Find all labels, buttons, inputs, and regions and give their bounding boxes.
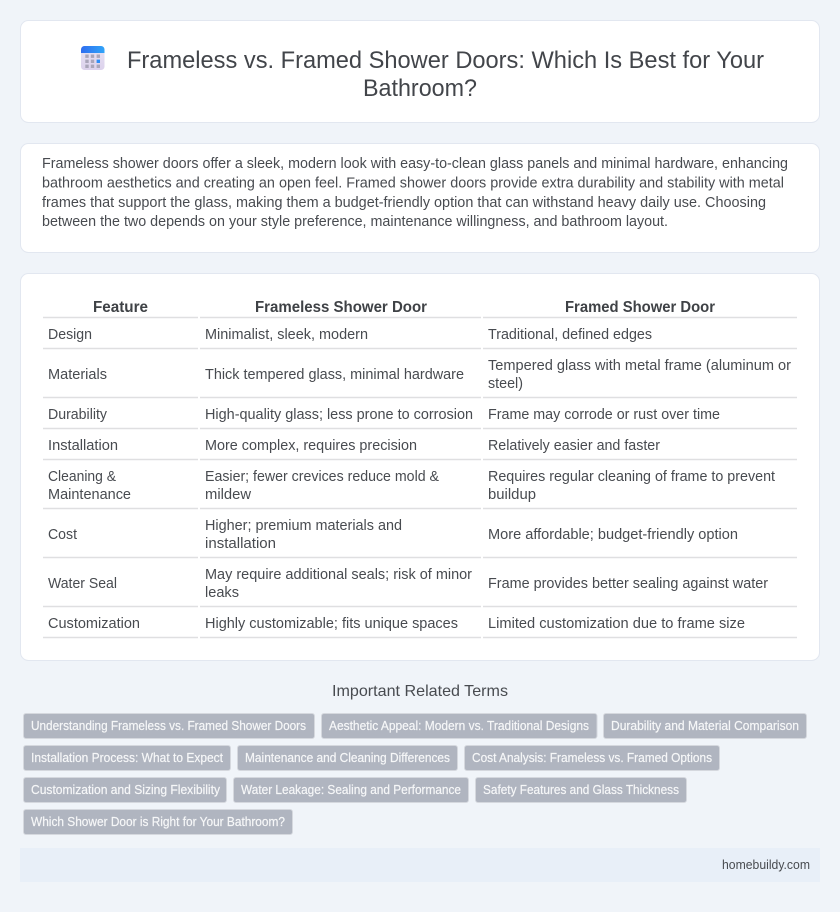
panel: intro text: Frameless shower doors offer a sleek, modern look with easy-to-clean glass panels and minimal hardware, enhancing xyxy=(42,156,788,172)
panel: intro text: between the two depends on your style preference, maintenance willingness, and bathroom layout. xyxy=(42,214,668,230)
footer xyxy=(20,848,820,882)
chip: understanding xyxy=(24,714,314,738)
row: design: Design xyxy=(48,327,92,343)
table header row: Framed Shower Door xyxy=(565,299,715,316)
row: water seal: Frame provides better sealing against water xyxy=(488,576,768,592)
row: water seal: May require additional seals; risk of minor xyxy=(205,567,472,583)
row: cleaning and maintenance: Easier; fewer crevices reduce mold & xyxy=(205,469,439,485)
chip: understanding: Understanding Frameless vs. Framed Shower Doors xyxy=(31,719,306,733)
chip: which shower door: Which Shower Door is Right for Your Bathroom? xyxy=(31,815,285,829)
row: customization: Limited customization due to frame size xyxy=(488,616,745,632)
row: cost: Higher; premium materials and xyxy=(205,518,402,534)
row: water seal xyxy=(43,567,797,606)
row: cleaning and maintenance: buildup xyxy=(488,487,536,503)
chip: installation: Installation Process: What to Expect xyxy=(31,751,224,765)
row: materials xyxy=(43,358,797,398)
row: installation: More complex, requires precision xyxy=(205,438,417,454)
row: cost: More affordable; budget-friendly option xyxy=(488,527,738,543)
row: materials: steel) xyxy=(488,376,523,392)
footer: homebuildy.com xyxy=(722,858,810,872)
chip: cost analysis: Cost Analysis: Frameless vs. Framed Options xyxy=(472,751,712,765)
title xyxy=(127,47,764,102)
chip: cost analysis xyxy=(464,746,720,770)
row: materials: Tempered glass with metal frame (aluminum or xyxy=(488,358,791,374)
chip: aesthetic appeal: Aesthetic Appeal: Modern vs. Traditional Designs xyxy=(329,719,589,733)
panel: header xyxy=(20,20,820,122)
panel: intro text: frames that support the glass, making them a budget-friendly option that can withstand heavy daily use. Choosing xyxy=(42,195,766,211)
chip: customization: Customization and Sizing Flexibility xyxy=(31,783,221,797)
chip: aesthetic appeal xyxy=(322,714,597,738)
row: cleaning and maintenance: Maintenance xyxy=(48,487,131,503)
row: cleaning and maintenance: Requires regular cleaning of frame to prevent xyxy=(488,469,775,485)
row: cleaning and maintenance: mildew xyxy=(205,487,252,503)
row: durability: High-quality glass; less prone to corrosion xyxy=(205,407,473,423)
row: water seal: Water Seal xyxy=(48,576,117,592)
title: Frameless vs. Framed Shower Doors: Which Is Best for Your xyxy=(127,47,764,74)
row: cleaning and maintenance: Cleaning & xyxy=(48,469,116,485)
chip: installation xyxy=(24,746,230,770)
row: durability xyxy=(43,407,797,428)
row: durability: Durability xyxy=(48,407,108,423)
row: customization xyxy=(43,616,797,638)
chip: durability: Durability and Material Comparison xyxy=(611,719,799,733)
row: installation: Relatively easier and faster xyxy=(488,438,660,454)
row: durability: Frame may corrode or rust over time xyxy=(488,407,720,423)
row: cost: installation xyxy=(205,536,276,552)
chip: water leakage xyxy=(234,778,468,802)
row: cleaning and maintenance xyxy=(43,469,797,508)
related term chips xyxy=(24,714,806,834)
chip: customization xyxy=(24,778,226,802)
chip: safety features: Safety Features and Glass Thickness xyxy=(483,783,679,797)
table header row xyxy=(43,299,797,318)
chip: durability xyxy=(604,714,806,738)
row: materials: Materials xyxy=(48,367,107,383)
row: water seal: leaks xyxy=(205,585,239,601)
row: installation xyxy=(43,438,797,460)
row: design xyxy=(43,327,797,348)
chip: water leakage: Water Leakage: Sealing and Performance xyxy=(241,783,461,797)
row: cost xyxy=(43,518,797,558)
row: design: Traditional, defined edges xyxy=(488,327,652,343)
row: installation: Installation xyxy=(48,438,118,454)
chip: maintenance xyxy=(238,746,458,770)
icon: calendar xyxy=(81,46,104,70)
chip: which shower door xyxy=(24,810,292,834)
table header row: Feature xyxy=(93,299,148,316)
row: design: Minimalist, sleek, modern xyxy=(205,327,368,343)
table header row: Frameless Shower Door xyxy=(255,299,427,316)
panel: intro text xyxy=(20,144,820,252)
row: customization: Highly customizable; fits unique spaces xyxy=(205,616,458,632)
panel: intro text: bathroom aesthetics and creating an open feel. Framed shower doors provide extra durability and stability with metal xyxy=(42,176,784,192)
panel: comparison table xyxy=(20,274,820,660)
row: materials: Thick tempered glass, minimal hardware xyxy=(205,367,464,383)
chip: safety features xyxy=(476,778,686,802)
title: Bathroom? xyxy=(363,75,477,102)
row: customization: Customization xyxy=(48,616,140,632)
row: cost: Cost xyxy=(48,527,77,543)
heading: important related terms: Important Related Terms xyxy=(332,683,508,700)
chip: maintenance: Maintenance and Cleaning Differences xyxy=(245,751,450,765)
